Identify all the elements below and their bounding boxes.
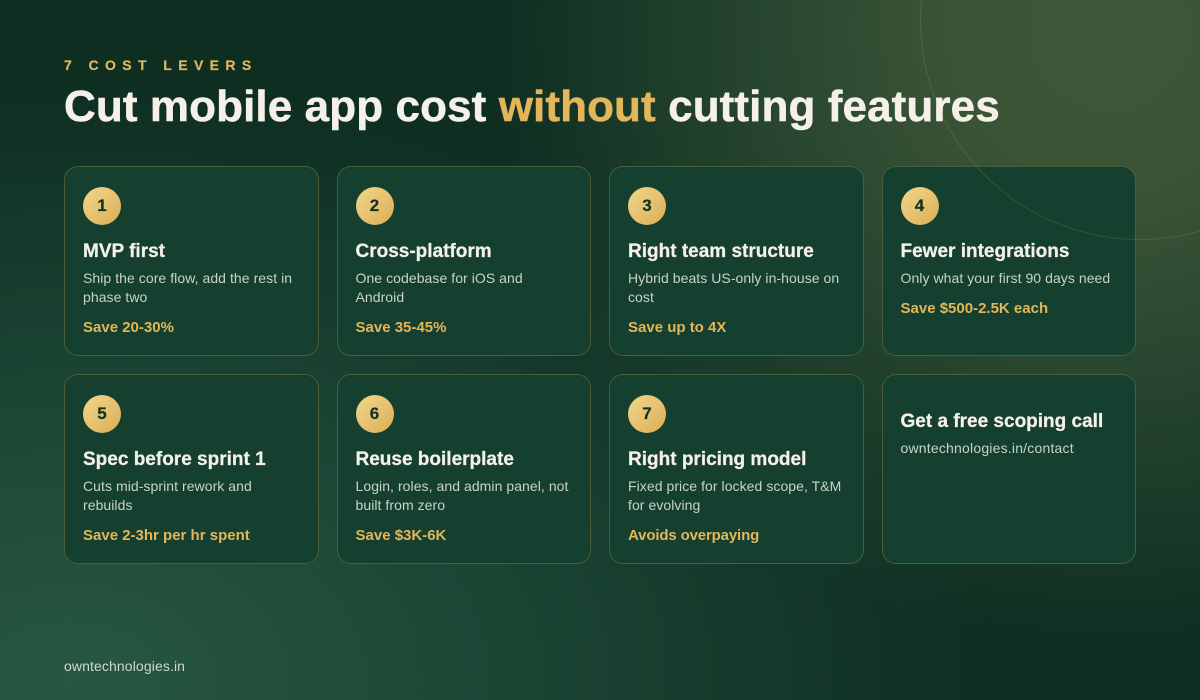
card 2 heading: Cross-platform: [356, 240, 492, 262]
card 4 saving: Save $500-2.5K each: [900, 300, 1048, 317]
CTA heading: Get a free scoping call: [900, 410, 1103, 432]
panel: card 3: [609, 166, 864, 356]
badge 7: [628, 395, 666, 433]
badge 2: 2: [370, 196, 379, 215]
badge 7: 7: [642, 404, 652, 423]
card 1 heading: MVP first: [83, 240, 165, 262]
badge 4: [900, 187, 938, 225]
card 3 saving: Save up to 4X: [628, 319, 726, 336]
panel: card 4: [882, 166, 1136, 356]
badge 4: 4: [915, 196, 924, 215]
title: Cut mobile app cost without cutting features: [64, 82, 1000, 131]
card 6 text: Login, roles, and admin panel, not built from zero: [356, 478, 568, 513]
badge 6: [356, 395, 394, 433]
card 3 text: Hybrid beats US-only in-house on cost: [628, 270, 839, 305]
eyebrow: 7 COST LEVERS: [64, 57, 258, 73]
footer: owntechnologies.in: [64, 658, 185, 674]
card 7 heading: Right pricing model: [628, 448, 806, 470]
card 5 heading: Spec before sprint 1: [83, 448, 266, 470]
card 5 saving: Save 2-3hr per hr spent: [83, 527, 250, 544]
card 4 text: Only what your first 90 days need: [900, 270, 1110, 286]
badge 1: [83, 187, 121, 225]
card 2 saving: Save 35-45%: [356, 319, 446, 336]
panel: card 1: [64, 166, 318, 356]
panel: card 6: [336, 374, 591, 564]
card 4 heading: Fewer integrations: [900, 240, 1069, 262]
badge 1: 1: [97, 196, 107, 215]
badge 5: [83, 395, 121, 433]
card 3 heading: Right team structure: [628, 240, 814, 262]
panel: card 5: [64, 374, 318, 564]
card 1 text: Ship the core flow, add the rest in phase two: [83, 270, 292, 305]
card 5 text: Cuts mid-sprint rework and rebuilds: [83, 478, 252, 513]
panel: card 2: [336, 166, 591, 356]
card 1 saving: Save 20-30%: [83, 319, 174, 336]
badge 5: 5: [97, 404, 107, 423]
card 6 heading: Reuse boilerplate: [356, 448, 514, 470]
badge 3: 3: [642, 196, 652, 215]
badge 6: 6: [370, 404, 379, 423]
card 6 saving: Save $3K-6K: [356, 527, 446, 544]
decorative ring: [920, 0, 1200, 240]
CTA link: owntechnologies.in/contact: [900, 440, 1074, 456]
card 2 text: One codebase for iOS and Android: [356, 270, 523, 305]
panel: card 7: [609, 374, 864, 564]
panel: call to action card: [882, 374, 1136, 564]
card 7 saving: Avoids overpaying: [628, 527, 759, 544]
badge 2: [356, 187, 394, 225]
badge 3: [628, 187, 666, 225]
card 7 text: Fixed price for locked scope, T&M for evolving: [628, 478, 841, 513]
